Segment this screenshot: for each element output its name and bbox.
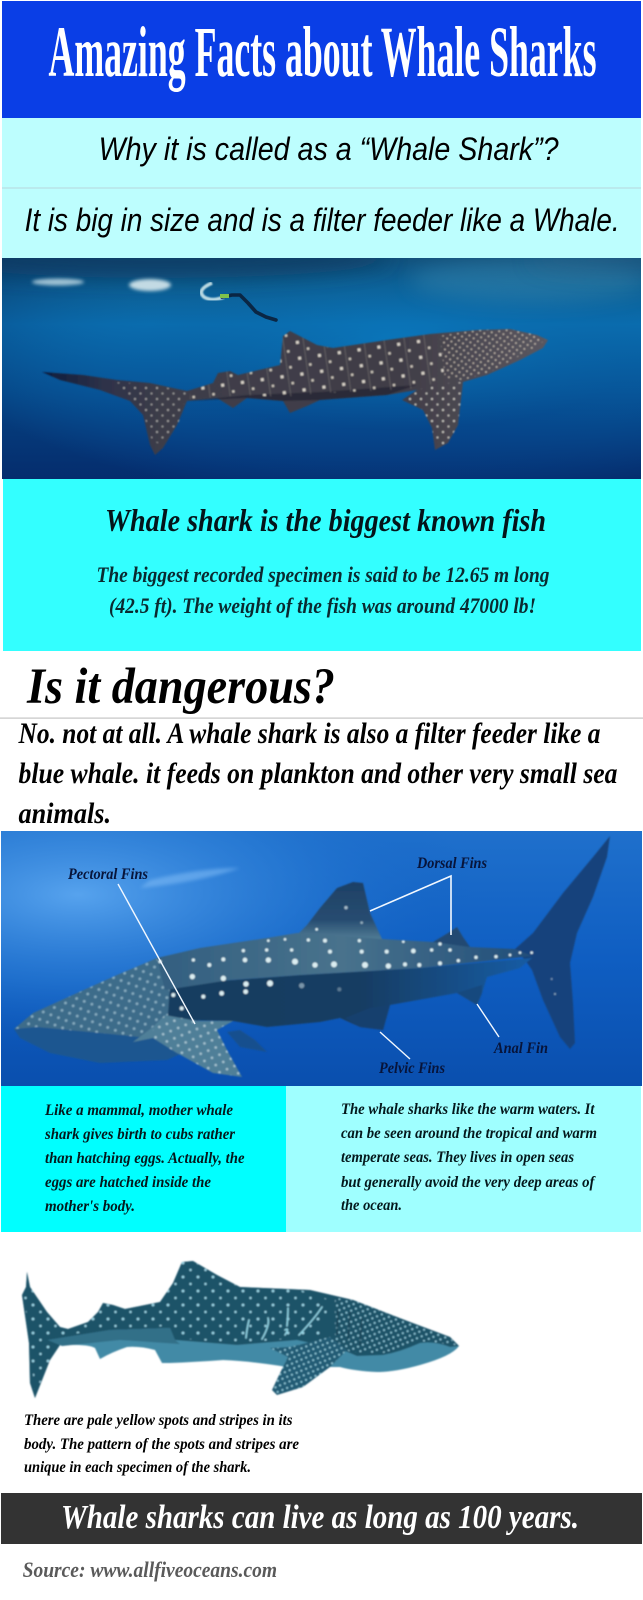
label: dorsal fins: Dorsal Fins: [416, 855, 487, 872]
title banner: [2, 1, 641, 118]
photo: labelled whale shark anatomy: [1, 831, 642, 1086]
panel: habitat fact: can be seen around the tropical and warm: [341, 1125, 597, 1142]
belly and lower body: [165, 958, 532, 1030]
pectoral fin: [133, 1015, 242, 1077]
panel: birth fact: mother's body.: [45, 1198, 135, 1215]
text: spots and stripes: [24, 1412, 299, 1476]
whale shark body: [14, 836, 610, 1077]
illustration: whale shark: [22, 1261, 459, 1398]
head: [14, 955, 172, 1037]
question panel: [2, 118, 641, 258]
body spots: [24, 1261, 330, 1395]
source: Source: www.allfiveoceans.com: [23, 1557, 277, 1582]
whale shark: [42, 329, 548, 455]
pelvic fin: [345, 1005, 390, 1030]
text: spots and stripes: body. The pattern of the spots and stripes are: [24, 1436, 299, 1453]
panel: biggest known fish: [3, 479, 641, 651]
panel: habitat fact: The whale sharks like the warm waters. It: [341, 1101, 595, 1118]
panel: birth fact: Like a mammal, mother whale: [44, 1102, 233, 1119]
question heading: Why it is called as a “Whale Shark”?: [99, 131, 559, 167]
tail fin: [515, 836, 610, 1049]
label: pelvic fins: Pelvic Fins: [379, 1060, 445, 1077]
panel heading: Whale shark is the biggest known fish: [105, 502, 546, 538]
diver: [220, 294, 276, 320]
label: anal fin: Anal Fin: [493, 1040, 548, 1057]
panel: birth fact: shark gives birth to cubs rather: [44, 1126, 236, 1143]
under head: [14, 1020, 200, 1063]
heading: is it dangerous: Is it dangerous?: [26, 659, 335, 715]
anal fin: [457, 985, 482, 1005]
text: not dangerous answer: [18, 717, 618, 830]
label: pelvic fins: [379, 1032, 445, 1077]
surface foam: [32, 278, 224, 300]
pectoral fin: [270, 1337, 347, 1395]
panel text: [96, 562, 550, 618]
stripes: [246, 1307, 322, 1339]
text: spots and stripes: unique in each specimen of the shark.: [24, 1459, 251, 1476]
panel: habitat fact: [286, 1086, 641, 1232]
panel: birth fact: [1, 1086, 286, 1232]
panel text: The biggest recorded specimen is said to be 12.65 m long: [96, 562, 550, 587]
panel: birth fact: than hatching eggs. Actually, the: [45, 1150, 244, 1167]
label: anal fin: [477, 1004, 548, 1057]
panel: habitat fact: the ocean.: [341, 1197, 402, 1214]
panel: habitat fact: but generally avoid the very deep areas of: [341, 1174, 596, 1191]
photo: whale shark and diver: [0, 238, 643, 479]
label: dorsal fins: [370, 855, 487, 935]
label: pectoral fins: [68, 866, 195, 1024]
panel text: (42.5 ft). The weight of the fish was around 47000 lb!: [109, 593, 536, 618]
first dorsal fin: [297, 882, 382, 945]
back band: [157, 933, 532, 990]
body spots: [158, 906, 556, 1010]
label: pectoral fins: Pectoral Fins: [68, 866, 148, 883]
second dorsal fin: [433, 927, 470, 950]
lifespan banner: [1, 1493, 642, 1544]
panel: birth fact: eggs are hatched inside the: [45, 1174, 211, 1191]
text: not dangerous answer: animals.: [18, 797, 111, 830]
panel: habitat fact: temperate seas. They lives in open seas: [341, 1149, 574, 1166]
text: spots and stripes: There are pale yellow spots and stripes in its: [24, 1412, 292, 1429]
